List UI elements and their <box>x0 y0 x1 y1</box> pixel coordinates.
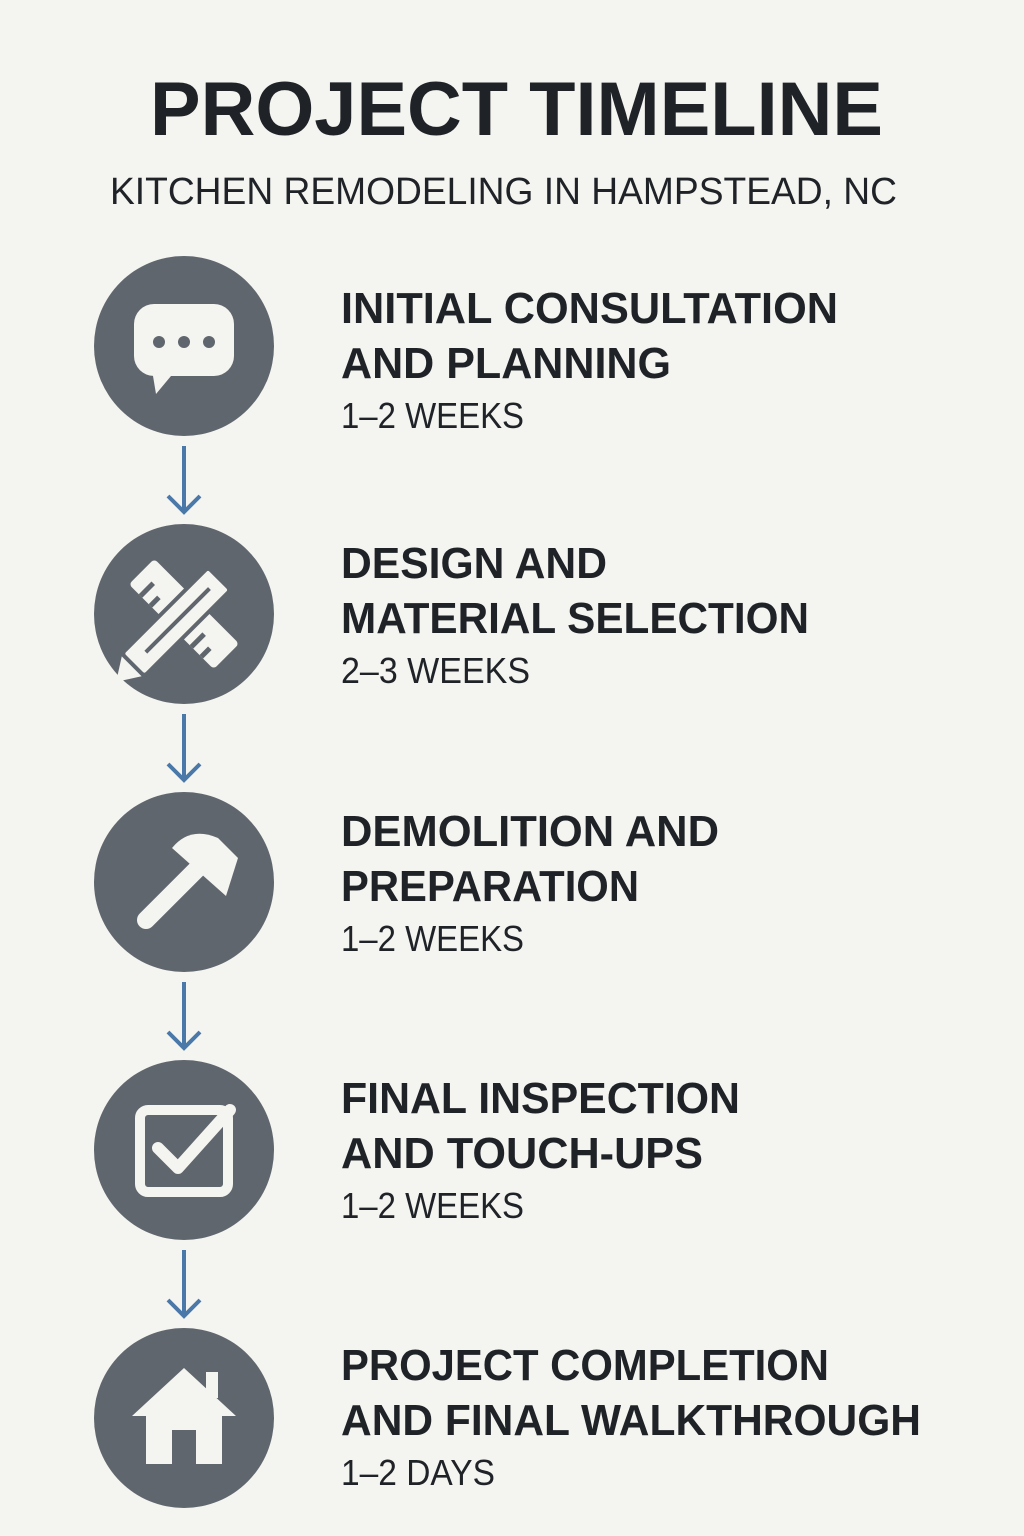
step 1: consultation: 1–2 WEEKS <box>341 395 524 436</box>
step 1: consultation <box>94 256 838 436</box>
icon: speech bubble <box>134 304 234 394</box>
step 4: inspection: FINAL INSPECTION <box>341 1074 740 1123</box>
icon: ruler and pencil <box>105 559 239 693</box>
step 3: demolition: DEMOLITION AND <box>341 807 719 856</box>
step 2: design <box>94 524 809 704</box>
step 5: completion: AND FINAL WALKTHROUGH <box>341 1396 921 1445</box>
step 3: demolition: PREPARATION <box>341 862 639 911</box>
step 2: design: MATERIAL SELECTION <box>341 594 809 643</box>
icon: hammer <box>146 834 238 920</box>
arrow 4 <box>168 1250 200 1316</box>
step 5: completion: 1–2 DAYS <box>341 1452 495 1493</box>
step 4: inspection: 1–2 WEEKS <box>341 1185 524 1226</box>
arrow 1 <box>168 446 200 512</box>
step 5: completion: PROJECT COMPLETION <box>341 1341 829 1390</box>
step 4: inspection: AND TOUCH-UPS <box>341 1129 703 1178</box>
step 1: consultation: AND PLANNING <box>341 339 671 388</box>
step 1: consultation: INITIAL CONSULTATION <box>341 284 838 333</box>
step 4: inspection <box>94 1060 740 1240</box>
title: PROJECT TIMELINE <box>150 67 883 152</box>
step 2: design: DESIGN AND <box>341 539 607 588</box>
icon: checkbox <box>140 1110 230 1192</box>
arrow 3 <box>168 982 200 1048</box>
arrow 2 <box>168 714 200 780</box>
step 3: demolition <box>94 792 719 972</box>
icon: house <box>132 1368 236 1464</box>
subtitle: KITCHEN REMODELING IN HAMPSTEAD, NC <box>110 171 897 213</box>
step 5: completion <box>94 1328 921 1508</box>
step 3: demolition: 1–2 WEEKS <box>341 918 524 959</box>
step 2: design: 2–3 WEEKS <box>341 650 530 691</box>
